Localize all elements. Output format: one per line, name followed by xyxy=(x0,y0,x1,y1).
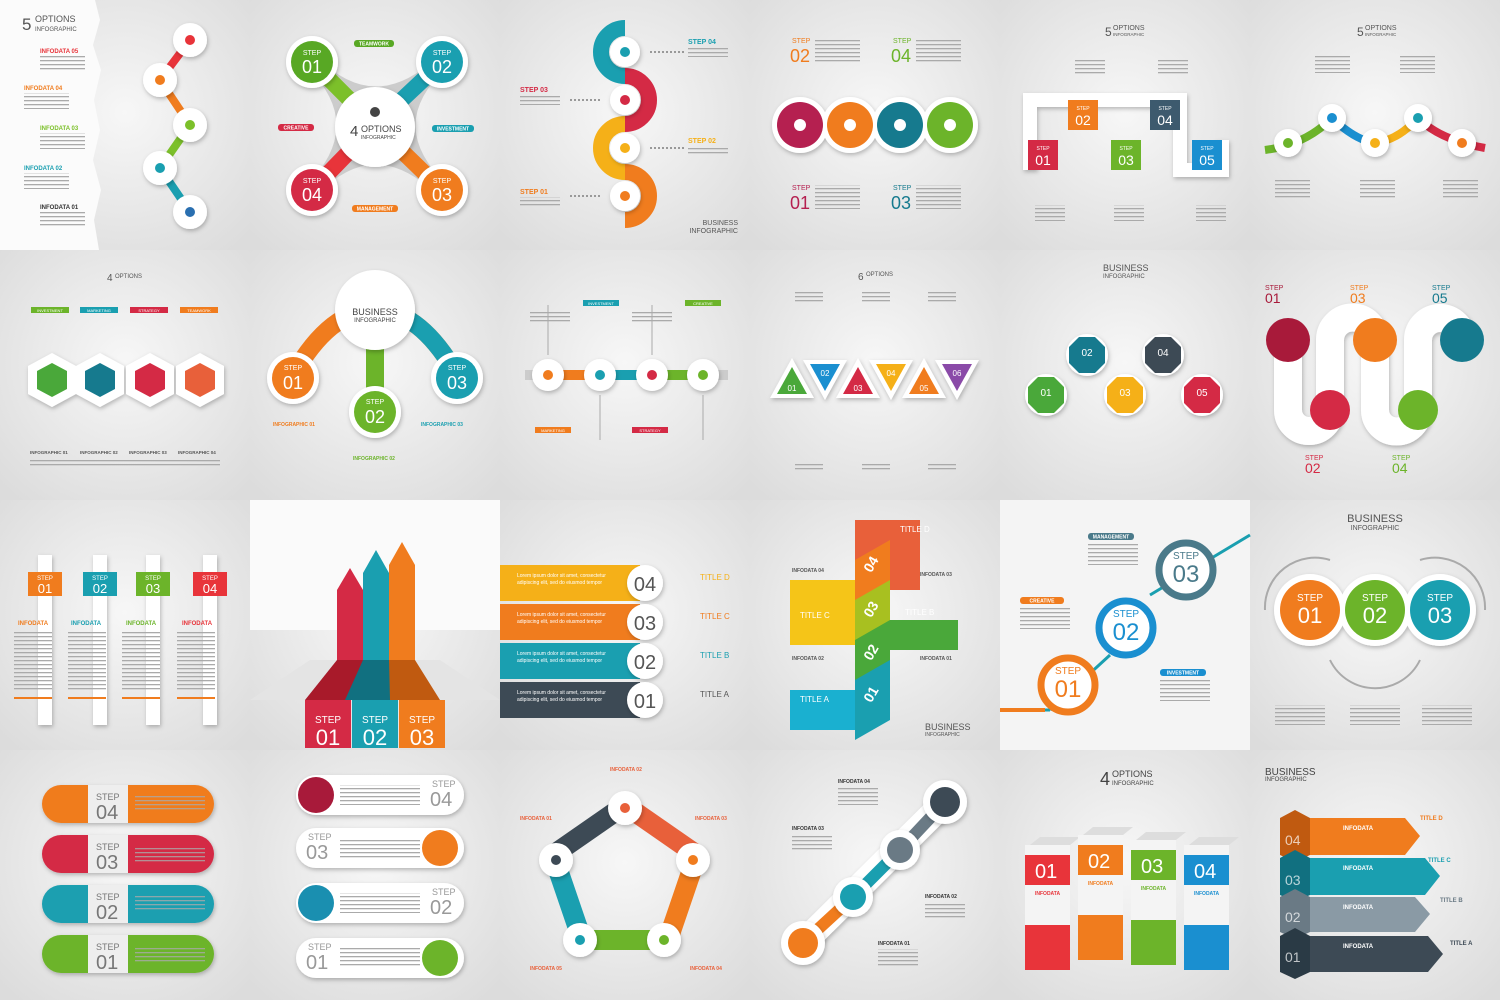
tile 23: 3D columns: 02 xyxy=(1088,851,1110,873)
tile 23: 3D columns: INFODATA xyxy=(1088,881,1113,887)
tile 13: vertical columns: INFODATA xyxy=(126,621,157,627)
tile 8: business hub: STEP xyxy=(448,365,466,372)
tile 17: ring steps: MANAGEMENT xyxy=(1093,534,1129,540)
tile 3: vertical snake: STEP 02 xyxy=(688,138,716,145)
tile 13: vertical columns: 03 xyxy=(146,581,160,596)
tile 3: vertical snake: STEP 04 xyxy=(688,39,716,46)
tile 19: pill rows: STEP xyxy=(96,792,120,802)
tile 8: business hub: INFOGRAPHIC 02 xyxy=(353,456,395,462)
tile 3: vertical snake: STEP 03 xyxy=(520,87,548,94)
tile 17: ring steps xyxy=(1000,533,1250,712)
tile 13: vertical columns: 04 xyxy=(203,581,217,596)
tile 19: pill rows: STEP xyxy=(96,892,120,902)
tile 7: hexagons: MARKETING xyxy=(87,308,111,313)
tile 7: hexagons: 4 xyxy=(107,273,113,284)
tile 2: 4 options hub: INVESTMENT xyxy=(437,126,469,132)
tile 8: business hub: INFOGRAPHIC 01 xyxy=(273,422,315,428)
tile 4: circles in a row: STEP xyxy=(893,38,912,45)
tile 11: octagons: 03 xyxy=(1119,388,1131,399)
tile 18: overlapping circles: STEP xyxy=(1297,593,1323,604)
tile 2: 4 options hub: STEP xyxy=(433,50,451,57)
tile 11: octagons: 02 xyxy=(1081,348,1093,359)
tile 20: alternating pills: STEP xyxy=(308,832,332,842)
tile 21: pentagon ring: INFODATA 03 xyxy=(695,816,727,822)
tile 8: business hub: INFOGRAPHIC 03 xyxy=(421,422,463,428)
tile 8: business hub: 01 xyxy=(283,373,303,393)
tile 4: circles in a row xyxy=(772,38,978,213)
tile 13: vertical columns: INFODATA xyxy=(18,621,49,627)
tile 15: horizontal bars: TITLE D xyxy=(700,573,730,582)
tile 7: hexagons: INFOGRAPHIC 01 xyxy=(30,450,68,455)
tile 2: 4 options hub: STEP xyxy=(303,178,321,185)
tile 9: timeline circles: INVESTMENT xyxy=(588,301,614,306)
tile 12: snake circles: 03 xyxy=(1350,290,1366,306)
tile 2: 4 options hub: CREATIVE xyxy=(284,126,309,132)
tile 23: 3D columns: 01 xyxy=(1035,861,1057,883)
tile 17: ring steps: STEP xyxy=(1113,609,1139,620)
tile 7: hexagons: TEAMWORK xyxy=(187,308,211,313)
tile 4: circles in a row: 02 xyxy=(790,46,810,66)
tile 5: zigzag squares: INFOGRAPHIC xyxy=(1113,32,1145,37)
tile 17: ring steps: STEP xyxy=(1055,666,1081,677)
tile 13: vertical columns: 01 xyxy=(38,581,52,596)
tile 16: staircase ribbons: BUSINESS xyxy=(925,722,971,732)
tile 3: vertical snake: INFOGRAPHIC xyxy=(689,228,738,235)
tile 24: stacked arrows: BUSINESS xyxy=(1265,767,1316,778)
tile 13: vertical columns: STEP xyxy=(92,576,108,582)
tile 11: octagons: BUSINESS xyxy=(1103,263,1149,273)
tile 18: overlapping circles: 03 xyxy=(1428,603,1452,628)
tile 10: triangles: OPTIONS xyxy=(866,272,893,278)
tile 7: hexagons: INFOGRAPHIC 03 xyxy=(129,450,167,455)
tile 24: stacked arrows: INFODATA xyxy=(1343,826,1374,832)
tile 10: triangles: 04 xyxy=(887,369,896,378)
tile 1: 5 options vertical: INFOGRAPHIC xyxy=(35,27,77,33)
tile 22: diagonal chain xyxy=(781,779,967,967)
tile 20: alternating pills: 02 xyxy=(430,897,452,919)
tile 6: wave: INFOGRAPHIC xyxy=(1365,32,1397,37)
tile 5: zigzag squares: 04 xyxy=(1157,112,1173,128)
tile 2: 4 options hub: TEAMWORK xyxy=(359,42,389,48)
tile 2: 4 options hub: OPTIONS xyxy=(361,124,402,134)
tile 19: pill rows: 03 xyxy=(96,852,118,874)
tile 20: alternating pills xyxy=(296,775,464,978)
tile 5: zigzag squares: 05 xyxy=(1199,152,1215,168)
tile 16: staircase ribbons: 02 xyxy=(860,641,882,663)
tile 2: 4 options hub: STEP xyxy=(303,50,321,57)
tile 15: horizontal bars: adipiscing elit, sed do eiusmod tempor xyxy=(517,580,602,586)
tile 5: zigzag squares: 03 xyxy=(1118,152,1134,168)
tile 24: stacked arrows: INFOGRAPHIC xyxy=(1265,777,1307,783)
tile 10: triangles: 6 xyxy=(858,272,864,283)
tile 5: zigzag squares: STEP xyxy=(1119,146,1133,152)
tile 1: 5 options vertical: INFODATA 04 xyxy=(24,86,63,92)
tile 24: stacked arrows: TITLE D xyxy=(1420,816,1443,822)
tile 15: horizontal bars: adipiscing elit, sed do eiusmod tempor xyxy=(517,697,602,703)
tile 14: upward arrows: 02 xyxy=(363,725,387,750)
tile 18: overlapping circles: 02 xyxy=(1363,603,1387,628)
tile 15: horizontal bars: Lorem ipsum dolor sit amet, consectetur xyxy=(517,690,606,696)
tile 16: staircase ribbons: TITLE B xyxy=(905,608,934,617)
tile 15: horizontal bars: Lorem ipsum dolor sit amet, consectetur xyxy=(517,651,606,657)
tile 20: alternating pills: STEP xyxy=(432,887,456,897)
tile 4: circles in a row: 04 xyxy=(891,46,911,66)
tile 3: vertical snake: STEP 01 xyxy=(520,189,548,196)
tile 17: ring steps: STEP xyxy=(1173,551,1199,562)
tile 19: pill rows: 02 xyxy=(96,902,118,924)
tile 12: snake circles: STEP xyxy=(1265,285,1284,292)
tile 24: stacked arrows xyxy=(1265,767,1473,979)
tile 10: triangles: 05 xyxy=(920,384,929,393)
tile 7: hexagons: INVESTMENT xyxy=(37,308,63,313)
tile 10: triangles: 02 xyxy=(821,369,830,378)
tile 14: upward arrows: 01 xyxy=(316,725,340,750)
tile 15: horizontal bars: adipiscing elit, sed do eiusmod tempor xyxy=(517,619,602,625)
tile 18: overlapping circles: INFOGRAPHIC xyxy=(1351,525,1399,532)
tile 23: 3D columns: INFOGRAPHIC xyxy=(1112,781,1154,787)
tile 19: pill rows xyxy=(42,785,214,974)
tile 17: ring steps: CREATIVE xyxy=(1030,598,1055,604)
tile 12: snake circles: STEP xyxy=(1392,455,1411,462)
tile 4: circles in a row: 03 xyxy=(891,193,911,213)
tile 12: snake circles: STEP xyxy=(1432,285,1451,292)
tile 4: circles in a row: STEP xyxy=(792,38,811,45)
tile 14: upward arrows: STEP xyxy=(315,715,341,726)
tile 1: 5 options vertical xyxy=(0,0,207,250)
tile 20: alternating pills: STEP xyxy=(308,942,332,952)
tile 20: alternating pills: 03 xyxy=(306,842,328,864)
tile 7: hexagons: INFOGRAPHIC 02 xyxy=(80,450,118,455)
tile 5: zigzag squares: 01 xyxy=(1035,152,1051,168)
tile 23: 3D columns: 03 xyxy=(1141,856,1163,878)
tile 24: stacked arrows: INFODATA xyxy=(1343,944,1374,950)
tile 15: horizontal bars: Lorem ipsum dolor sit amet, consectetur xyxy=(517,573,606,579)
tile 16: staircase ribbons: 01 xyxy=(860,683,882,705)
tile 16: staircase ribbons: TITLE D xyxy=(900,525,930,534)
tile 14: upward arrows: 03 xyxy=(410,725,434,750)
tile 9: timeline circles: CREATIVE xyxy=(693,301,713,306)
tile 24: stacked arrows: INFODATA xyxy=(1343,905,1374,911)
tile 6: wave: 5 xyxy=(1357,25,1364,39)
tile 2: 4 options hub xyxy=(278,36,474,216)
tile 7: hexagons: STRATEGY xyxy=(138,308,160,313)
tile 24: stacked arrows: 01 xyxy=(1285,949,1301,965)
tile 11: octagons xyxy=(1025,263,1223,416)
tile 4: circles in a row: STEP xyxy=(893,185,912,192)
tile 13: vertical columns: STEP xyxy=(145,576,161,582)
tile 16: staircase ribbons: INFODATA 04 xyxy=(792,568,824,574)
tile 15: horizontal bars: Lorem ipsum dolor sit amet, consectetur xyxy=(517,612,606,618)
tile 1: 5 options vertical: INFODATA 05 xyxy=(40,49,79,55)
tile 12: snake circles: 04 xyxy=(1392,460,1408,476)
tile 6: wave xyxy=(1265,25,1485,198)
tile 23: 3D columns: INFODATA xyxy=(1194,891,1219,897)
tile 2: 4 options hub: STEP xyxy=(433,178,451,185)
tile 21: pentagon ring: INFODATA 01 xyxy=(520,816,552,822)
tile 23: 3D columns: INFODATA xyxy=(1141,886,1166,892)
tile 18: overlapping circles: BUSINESS xyxy=(1347,513,1403,525)
tile 21: pentagon ring: INFODATA 04 xyxy=(690,966,722,972)
tile 24: stacked arrows: TITLE C xyxy=(1428,858,1451,864)
tile 17: ring steps: 01 xyxy=(1055,676,1081,703)
tile 18: overlapping circles: STEP xyxy=(1362,593,1388,604)
tile 15: horizontal bars: 03 xyxy=(634,613,656,635)
tile 11: octagons: 01 xyxy=(1040,388,1052,399)
tile 24: stacked arrows: INFODATA xyxy=(1343,866,1374,872)
tile 18: overlapping circles: STEP xyxy=(1427,593,1453,604)
tile 3: vertical snake: BUSINESS xyxy=(703,220,738,227)
tile 15: horizontal bars xyxy=(500,565,730,718)
tile 12: snake circles: 05 xyxy=(1432,290,1448,306)
tile 11: octagons: INFOGRAPHIC xyxy=(1103,274,1145,280)
tile 1: 5 options vertical: INFODATA 02 xyxy=(24,166,63,172)
tile 21: pentagon ring xyxy=(520,767,727,972)
tile 15: horizontal bars: adipiscing elit, sed do eiusmod tempor xyxy=(517,658,602,664)
tile 23: 3D columns: OPTIONS xyxy=(1112,769,1153,779)
tile 9: timeline circles: MARKETING xyxy=(541,428,565,433)
tile 5: zigzag squares: 02 xyxy=(1075,112,1091,128)
tile 22: diagonal chain: INFODATA 03 xyxy=(792,826,824,832)
tile 3: vertical snake xyxy=(520,28,738,235)
tile 12: snake circles: 01 xyxy=(1265,290,1281,306)
tile 5: zigzag squares: STEP xyxy=(1200,146,1214,152)
tile 7: hexagons: OPTIONS xyxy=(115,274,142,280)
tile 8: business hub: BUSINESS xyxy=(352,307,398,317)
tile 8: business hub: INFOGRAPHIC xyxy=(354,318,396,324)
tile 12: snake circles: 02 xyxy=(1305,460,1321,476)
tile 12: snake circles xyxy=(1265,285,1484,476)
tile 16: staircase ribbons: INFODATA 01 xyxy=(920,656,952,662)
tile 5: zigzag squares: STEP xyxy=(1158,106,1172,112)
tile 6: wave: OPTIONS xyxy=(1365,25,1397,32)
tile 15: horizontal bars: 01 xyxy=(634,691,656,713)
tile 5: zigzag squares: STEP xyxy=(1036,146,1050,152)
tile 18: overlapping circles xyxy=(1265,513,1485,725)
tile 13: vertical columns: INFODATA xyxy=(71,621,102,627)
tile 8: business hub: 02 xyxy=(365,407,385,427)
tile 8: business hub: STEP xyxy=(284,365,302,372)
tile 2: 4 options hub: 01 xyxy=(302,57,322,77)
tile 24: stacked arrows: TITLE B xyxy=(1440,898,1463,904)
tile 1: 5 options vertical: INFODATA 01 xyxy=(40,205,79,211)
tile 11: octagons: 05 xyxy=(1196,388,1208,399)
tile 10: triangles: 03 xyxy=(854,384,863,393)
tile 13: vertical columns: 02 xyxy=(93,581,107,596)
tile 15: horizontal bars: 04 xyxy=(634,574,656,596)
tile 19: pill rows: 01 xyxy=(96,952,118,974)
tile 20: alternating pills: 01 xyxy=(306,952,328,974)
tile 16: staircase ribbons: TITLE C xyxy=(800,611,830,620)
tile 1: 5 options vertical: 5 xyxy=(22,15,31,34)
tile 22: diagonal chain: INFODATA 01 xyxy=(878,941,910,947)
tile 5: zigzag squares: STEP xyxy=(1076,106,1090,112)
tile 14: upward arrows: STEP xyxy=(409,715,435,726)
tile 2: 4 options hub: INFOGRAPHIC xyxy=(361,135,396,141)
tile 8: business hub: 03 xyxy=(447,373,467,393)
tile 21: pentagon ring: INFODATA 05 xyxy=(530,966,562,972)
tile 13: vertical columns: INFODATA xyxy=(182,621,213,627)
tile 13: vertical columns: STEP xyxy=(37,576,53,582)
tile 2: 4 options hub: 4 xyxy=(350,123,358,140)
tile 10: triangles: 06 xyxy=(953,369,962,378)
tile 15: horizontal bars: TITLE C xyxy=(700,612,730,621)
tile 2: 4 options hub: MANAGEMENT xyxy=(357,206,393,212)
tile 10: triangles: 01 xyxy=(788,384,797,393)
tile 9: timeline circles: STRATEGY xyxy=(639,428,661,433)
tile 15: horizontal bars: 02 xyxy=(634,652,656,674)
tile 4: circles in a row: 01 xyxy=(790,193,810,213)
tile 24: stacked arrows: 02 xyxy=(1285,909,1301,925)
tile 10: triangles xyxy=(770,272,979,472)
tile 17: ring steps: 03 xyxy=(1173,561,1199,588)
tile 5: zigzag squares: 5 xyxy=(1105,25,1112,39)
tile 8: business hub: STEP xyxy=(366,399,384,406)
tile 19: pill rows: 04 xyxy=(96,802,118,824)
tile 17: ring steps: 02 xyxy=(1113,619,1139,646)
tile 9: timeline circles xyxy=(525,300,728,440)
tile 21: pentagon ring: INFODATA 02 xyxy=(610,767,642,773)
tile 23: 3D columns: 04 xyxy=(1194,861,1216,883)
tile 2: 4 options hub: 03 xyxy=(432,185,452,205)
tile 23: 3D columns xyxy=(1025,769,1239,970)
tile 22: diagonal chain: INFODATA 04 xyxy=(838,779,870,785)
tile 12: snake circles: STEP xyxy=(1305,455,1324,462)
tile 16: staircase ribbons: 03 xyxy=(860,598,882,620)
tile 5: zigzag squares xyxy=(1028,25,1226,221)
tile 19: pill rows: STEP xyxy=(96,942,120,952)
tile 2: 4 options hub: 02 xyxy=(432,57,452,77)
tile 14: upward arrows xyxy=(250,500,500,750)
tile 2: 4 options hub: 04 xyxy=(302,185,322,205)
tile 16: staircase ribbons: 04 xyxy=(860,553,882,575)
tile 7: hexagons: INFOGRAPHIC 04 xyxy=(178,450,216,455)
tile 16: staircase ribbons: INFODATA 03 xyxy=(920,572,952,578)
tile 7: hexagons xyxy=(28,273,224,468)
tile 13: vertical columns: STEP xyxy=(202,576,218,582)
tile 1: 5 options vertical: INFODATA 03 xyxy=(40,126,79,132)
tile 16: staircase ribbons: INFODATA 02 xyxy=(792,656,824,662)
tile 22: diagonal chain: INFODATA 02 xyxy=(925,894,957,900)
tile 23: 3D columns: 4 xyxy=(1100,769,1110,789)
tile 15: horizontal bars: TITLE A xyxy=(700,690,730,699)
tile 24: stacked arrows: TITLE A xyxy=(1450,941,1473,947)
tile 16: staircase ribbons xyxy=(790,520,971,740)
tile 17: ring steps: INVESTMENT xyxy=(1167,670,1199,676)
tile 19: pill rows: STEP xyxy=(96,842,120,852)
tile 18: overlapping circles: 01 xyxy=(1298,603,1322,628)
tile 20: alternating pills: STEP xyxy=(432,779,456,789)
tile 1: 5 options vertical: OPTIONS xyxy=(35,14,76,24)
tile 11: octagons: 04 xyxy=(1157,348,1169,359)
tile 23: 3D columns: INFODATA xyxy=(1035,891,1060,897)
tile 24: stacked arrows: 04 xyxy=(1285,832,1301,848)
tile 20: alternating pills: 04 xyxy=(430,789,452,811)
tile 4: circles in a row: STEP xyxy=(792,185,811,192)
tile 13: vertical columns xyxy=(14,555,227,725)
tile 16: staircase ribbons: INFOGRAPHIC xyxy=(925,732,960,738)
tile 5: zigzag squares: OPTIONS xyxy=(1113,25,1145,32)
tile 15: horizontal bars: TITLE B xyxy=(700,651,729,660)
tile 24: stacked arrows: 03 xyxy=(1285,872,1301,888)
tile 16: staircase ribbons: TITLE A xyxy=(800,695,830,704)
tile 14: upward arrows: STEP xyxy=(362,715,388,726)
tile 8: business hub xyxy=(267,270,483,462)
tile 12: snake circles: STEP xyxy=(1350,285,1369,292)
